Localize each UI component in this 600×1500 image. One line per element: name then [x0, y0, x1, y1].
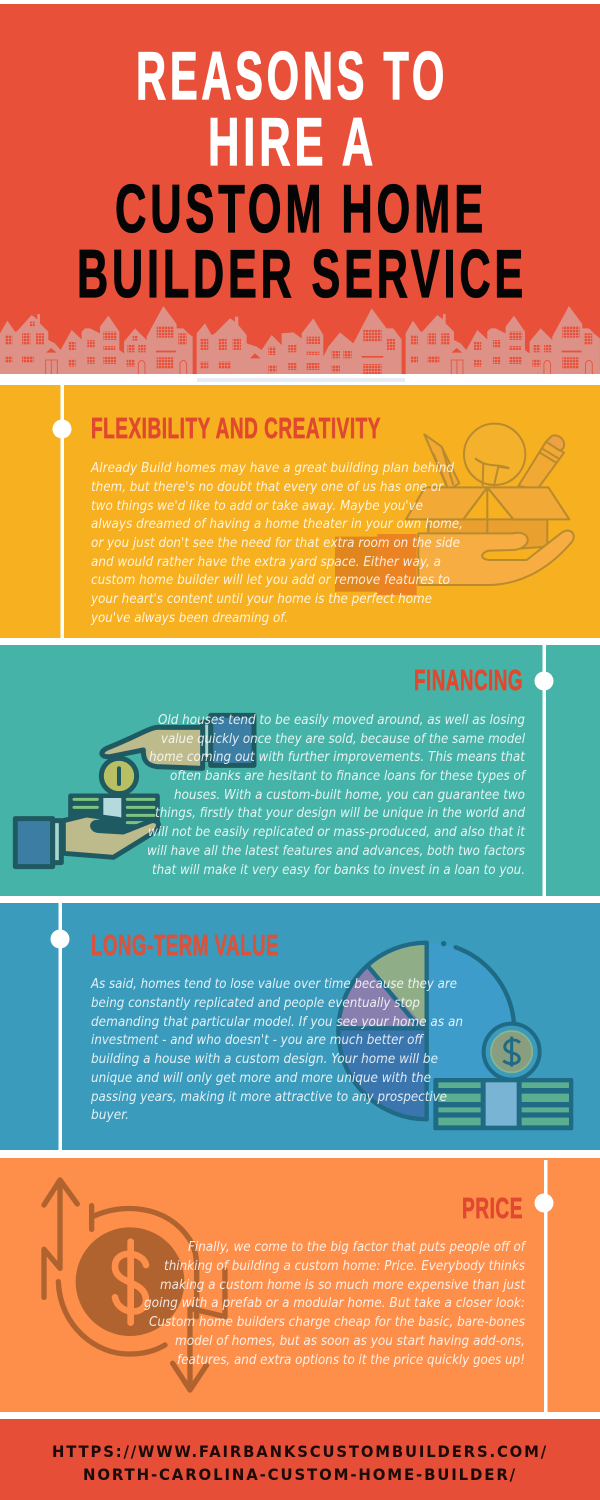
body text: you've always been dreaming of. [90, 610, 288, 626]
body text: will have all the latest features and advances, both two factors [147, 843, 525, 859]
icon: hands exchanging money [15, 715, 254, 867]
heading: LONG-TERM VALUE [91, 930, 279, 962]
timeline marker [534, 645, 554, 896]
panel: header [0, 4, 600, 374]
body text: will not be easily replicated or mass-produced, and also that it [148, 824, 526, 840]
body text: always dreamed of having a home theater in your own home, [91, 516, 463, 532]
body text: and would rather have the extra yard space. Either way, a [91, 554, 441, 570]
title: HIRE A [208, 104, 377, 180]
body text: going with a prefab or a modular home. But take a closer look: [144, 1295, 525, 1311]
body text: unique and will only get more and more unique with the [91, 1070, 431, 1086]
body text: or you just don't see the need for that extra room on the side [91, 535, 460, 551]
body text: model of homes, but as soon as you start having add-ons, [175, 1333, 525, 1349]
panel: price [0, 1158, 600, 1412]
body text: investment - and who doesn't - you are much better off [91, 1032, 424, 1048]
body text: building a house with a custom design. Your home will be [91, 1051, 438, 1067]
body text: things, firstly that your design will be unique in the world and [155, 805, 525, 821]
body text: features, and extra options to it the price quickly goes up! [177, 1352, 525, 1368]
panel: flexibility and creativity [0, 385, 600, 638]
body text: thinking of building a custom home: Price. Everybody thinks [164, 1258, 525, 1274]
body text: As said, homes tend to lose value over time because they are [90, 976, 457, 992]
heading: FINANCING [414, 665, 523, 697]
body text: them, but there's no doubt that every one of us has one or [91, 479, 444, 495]
body text: Old houses tend to be easily moved around, as well as losing [158, 712, 525, 728]
body text: being constantly replicated and people eventually stop [91, 995, 420, 1011]
body text: home coming out with further improvements. This means that [149, 749, 526, 765]
body text: that will make it very easy for banks to invest in a loan to you. [152, 862, 525, 878]
body text: passing years, making it more attractive to any prospective [90, 1089, 447, 1105]
panel: footer URL [0, 1419, 600, 1500]
body text: Already Build homes may have a great building plan behind [90, 460, 454, 476]
title [77, 38, 527, 312]
icon: pie chart with money [338, 941, 571, 1128]
body text: demanding that particular model. If you see your home as an [91, 1014, 463, 1030]
footer text [52, 1442, 548, 1484]
body text: often banks are hesitant to finance loans for these types of [170, 768, 527, 784]
body text [90, 460, 463, 626]
panel: financing [0, 645, 600, 896]
timeline marker [50, 903, 70, 1150]
timeline marker [534, 1160, 554, 1412]
footer text: HTTPS://WWW.FAIRBANKSCUSTOMBUILDERS.COM/ [52, 1442, 548, 1461]
footer text: NORTH-CAROLINA-CUSTOM-HOME-BUILDER/ [83, 1465, 517, 1484]
icon: idea box in hand [335, 424, 574, 595]
body text: buyer. [91, 1107, 129, 1123]
faint strip below houses [197, 378, 405, 382]
body text [90, 976, 463, 1123]
body text: Custom home builders charge cheap for the basic, bare-bones [149, 1314, 525, 1330]
icon: dollar with up and down arrows [44, 1180, 225, 1390]
heading: PRICE [462, 1193, 523, 1225]
body text: making a custom home is so much more expensive than just [160, 1277, 526, 1293]
body text: houses. With a custom-built home, you can guarantee two [174, 787, 525, 803]
panel: long-term value [0, 903, 600, 1150]
body text: value quickly once they are sold, because of the same model [161, 731, 525, 747]
heading: FLEXIBILITY AND CREATIVITY [91, 413, 381, 445]
body text: your heart's content until your home is the perfect home [90, 591, 432, 607]
body text: custom home builder will let you add or remove features to [91, 572, 450, 588]
icon: row of houses [0, 306, 600, 374]
body text: two things we'd like to add or take away. Maybe you've [91, 498, 423, 514]
timeline marker [52, 385, 72, 638]
body text [144, 1239, 527, 1368]
body text [147, 712, 527, 878]
body text: Finally, we come to the big factor that puts people off of [188, 1239, 527, 1255]
